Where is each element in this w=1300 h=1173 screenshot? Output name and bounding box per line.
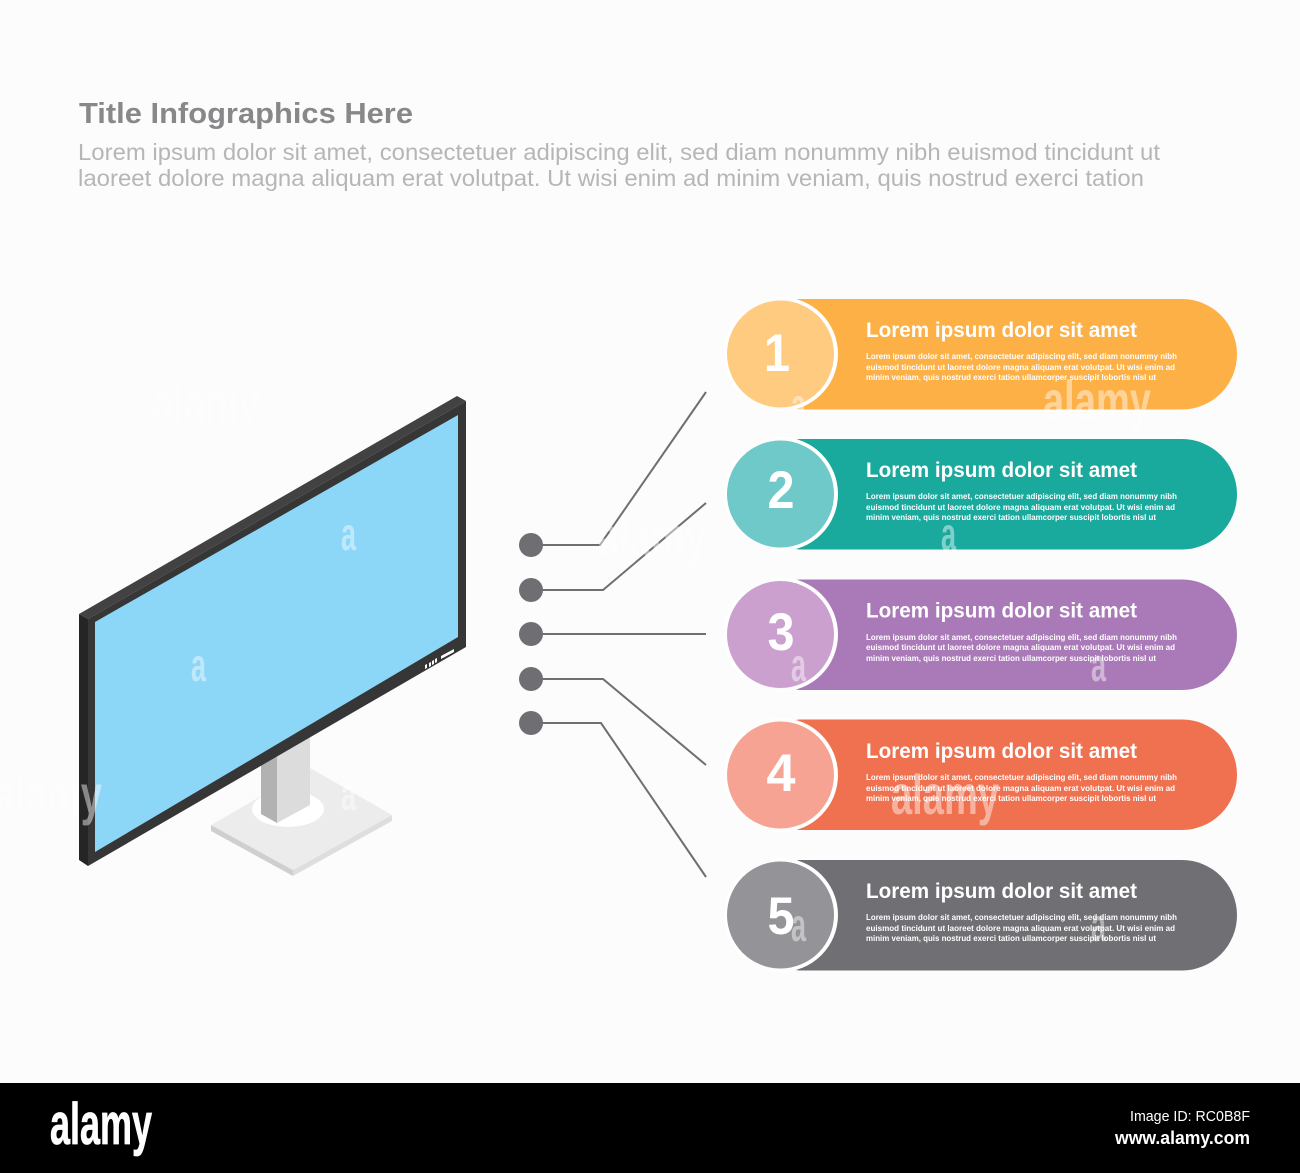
intro text block: laoreet dolore magna aliquam erat volutpat. Ut wisi enim ad minim veniam, quis nostrud exerci tation [78,165,1144,191]
number 3: 3 [768,603,794,662]
footer logo: alamy [50,1092,152,1157]
panel: item 4 [724,718,1237,832]
panel: item 3 [724,578,1237,692]
panel: item 2 [724,437,1237,551]
intro text block [78,139,1161,191]
footer image id: Image ID: RC0B8F [1130,1108,1250,1125]
watermarks: alamy [891,763,999,826]
icon: isometric computer monitor [79,396,466,876]
monitor stand base [211,768,392,876]
body text 1: Lorem ipsum dolor sit amet, consectetuer adipiscing elit, sed diam nonummy nibh [866,351,1177,361]
body text 1: minim veniam, quis nostrud exerci tation ullamcorper suscipit lobortis nisl ut [866,372,1156,382]
monitor top edge [79,396,466,619]
watermarks: a [341,508,356,560]
body text 2: minim veniam, quis nostrud exerci tation ullamcorper suscipit lobortis nisl ut [866,512,1156,522]
body text 4: minim veniam, quis nostrud exerci tation ullamcorper suscipit lobortis nisl ut [866,793,1156,803]
monitor side edge [79,614,88,866]
watermarks: a [341,768,356,820]
number 1: 1 [764,324,790,383]
body text 5: euismod tincidunt ut laoreet dolore magna aliquam erat volutpat. Ut wisi enim ad [866,923,1175,933]
monitor front bezel [88,401,466,866]
number 5: 5 [768,887,794,946]
watermarks: a [791,899,806,951]
monitor screen [95,415,458,852]
body text 2 [866,491,1177,522]
body text 2: Lorem ipsum dolor sit amet, consectetuer adipiscing elit, sed diam nonummy nibh [866,491,1177,501]
heading 4: Lorem ipsum dolor sit amet [866,740,1137,763]
panel: item 5 [724,858,1237,972]
body text 3: minim veniam, quis nostrud exerci tation ullamcorper suscipit lobortis nisl ut [866,653,1156,663]
footer url: www.alamy.com [1114,1128,1250,1148]
watermarks: a [1091,899,1106,951]
heading 3: Lorem ipsum dolor sit amet [866,600,1137,622]
title: Title Infographics Here [79,98,413,130]
watermarks: alamy [1043,369,1151,432]
heading 1: Lorem ipsum dolor sit amet [866,319,1137,342]
watermarks: a [791,639,806,691]
monitor buttons [425,649,454,669]
panel: item 1 [724,297,1237,411]
footer bar [0,1083,1300,1173]
body text 5: Lorem ipsum dolor sit amet, consectetuer adipiscing elit, sed diam nonummy nibh [866,912,1177,922]
number 4: 4 [766,744,796,803]
heading 5: Lorem ipsum dolor sit amet [866,880,1137,903]
watermarks [0,369,1151,951]
connector dots [519,533,543,735]
monitor stand neck [261,731,310,823]
body text 2: euismod tincidunt ut laoreet dolore magna aliquam erat volutpat. Ut wisi enim ad [866,502,1175,512]
intro text block: Lorem ipsum dolor sit amet, consectetuer adipiscing elit, sed diam nonummy nibh euismod tincidunt ut [78,139,1161,165]
watermarks: a [1091,639,1106,691]
body text 1: euismod tincidunt ut laoreet dolore magna aliquam erat volutpat. Ut wisi enim ad [866,362,1175,372]
body text 5 [866,912,1177,943]
watermarks: alamy [152,371,260,434]
watermarks: a [191,639,206,691]
body text 5: minim veniam, quis nostrud exerci tation ullamcorper suscipit lobortis nisl ut [866,933,1156,943]
watermarks: a [791,379,806,431]
body text 3: euismod tincidunt ut laoreet dolore magna aliquam erat volutpat. Ut wisi enim ad [866,642,1175,652]
number 2: 2 [768,461,794,520]
body text 3 [866,632,1177,663]
body text 4 [866,772,1177,803]
watermarks: a [941,508,956,560]
watermarks: alamy [598,505,706,568]
body text 4: euismod tincidunt ut laoreet dolore magna aliquam erat volutpat. Ut wisi enim ad [866,783,1175,793]
body text 4: Lorem ipsum dolor sit amet, consectetuer adipiscing elit, sed diam nonummy nibh [866,772,1177,782]
heading 2: Lorem ipsum dolor sit amet [866,459,1137,482]
connector lines [531,392,706,877]
body text 1 [866,351,1177,382]
body text 3: Lorem ipsum dolor sit amet, consectetuer adipiscing elit, sed diam nonummy nibh [866,632,1177,642]
